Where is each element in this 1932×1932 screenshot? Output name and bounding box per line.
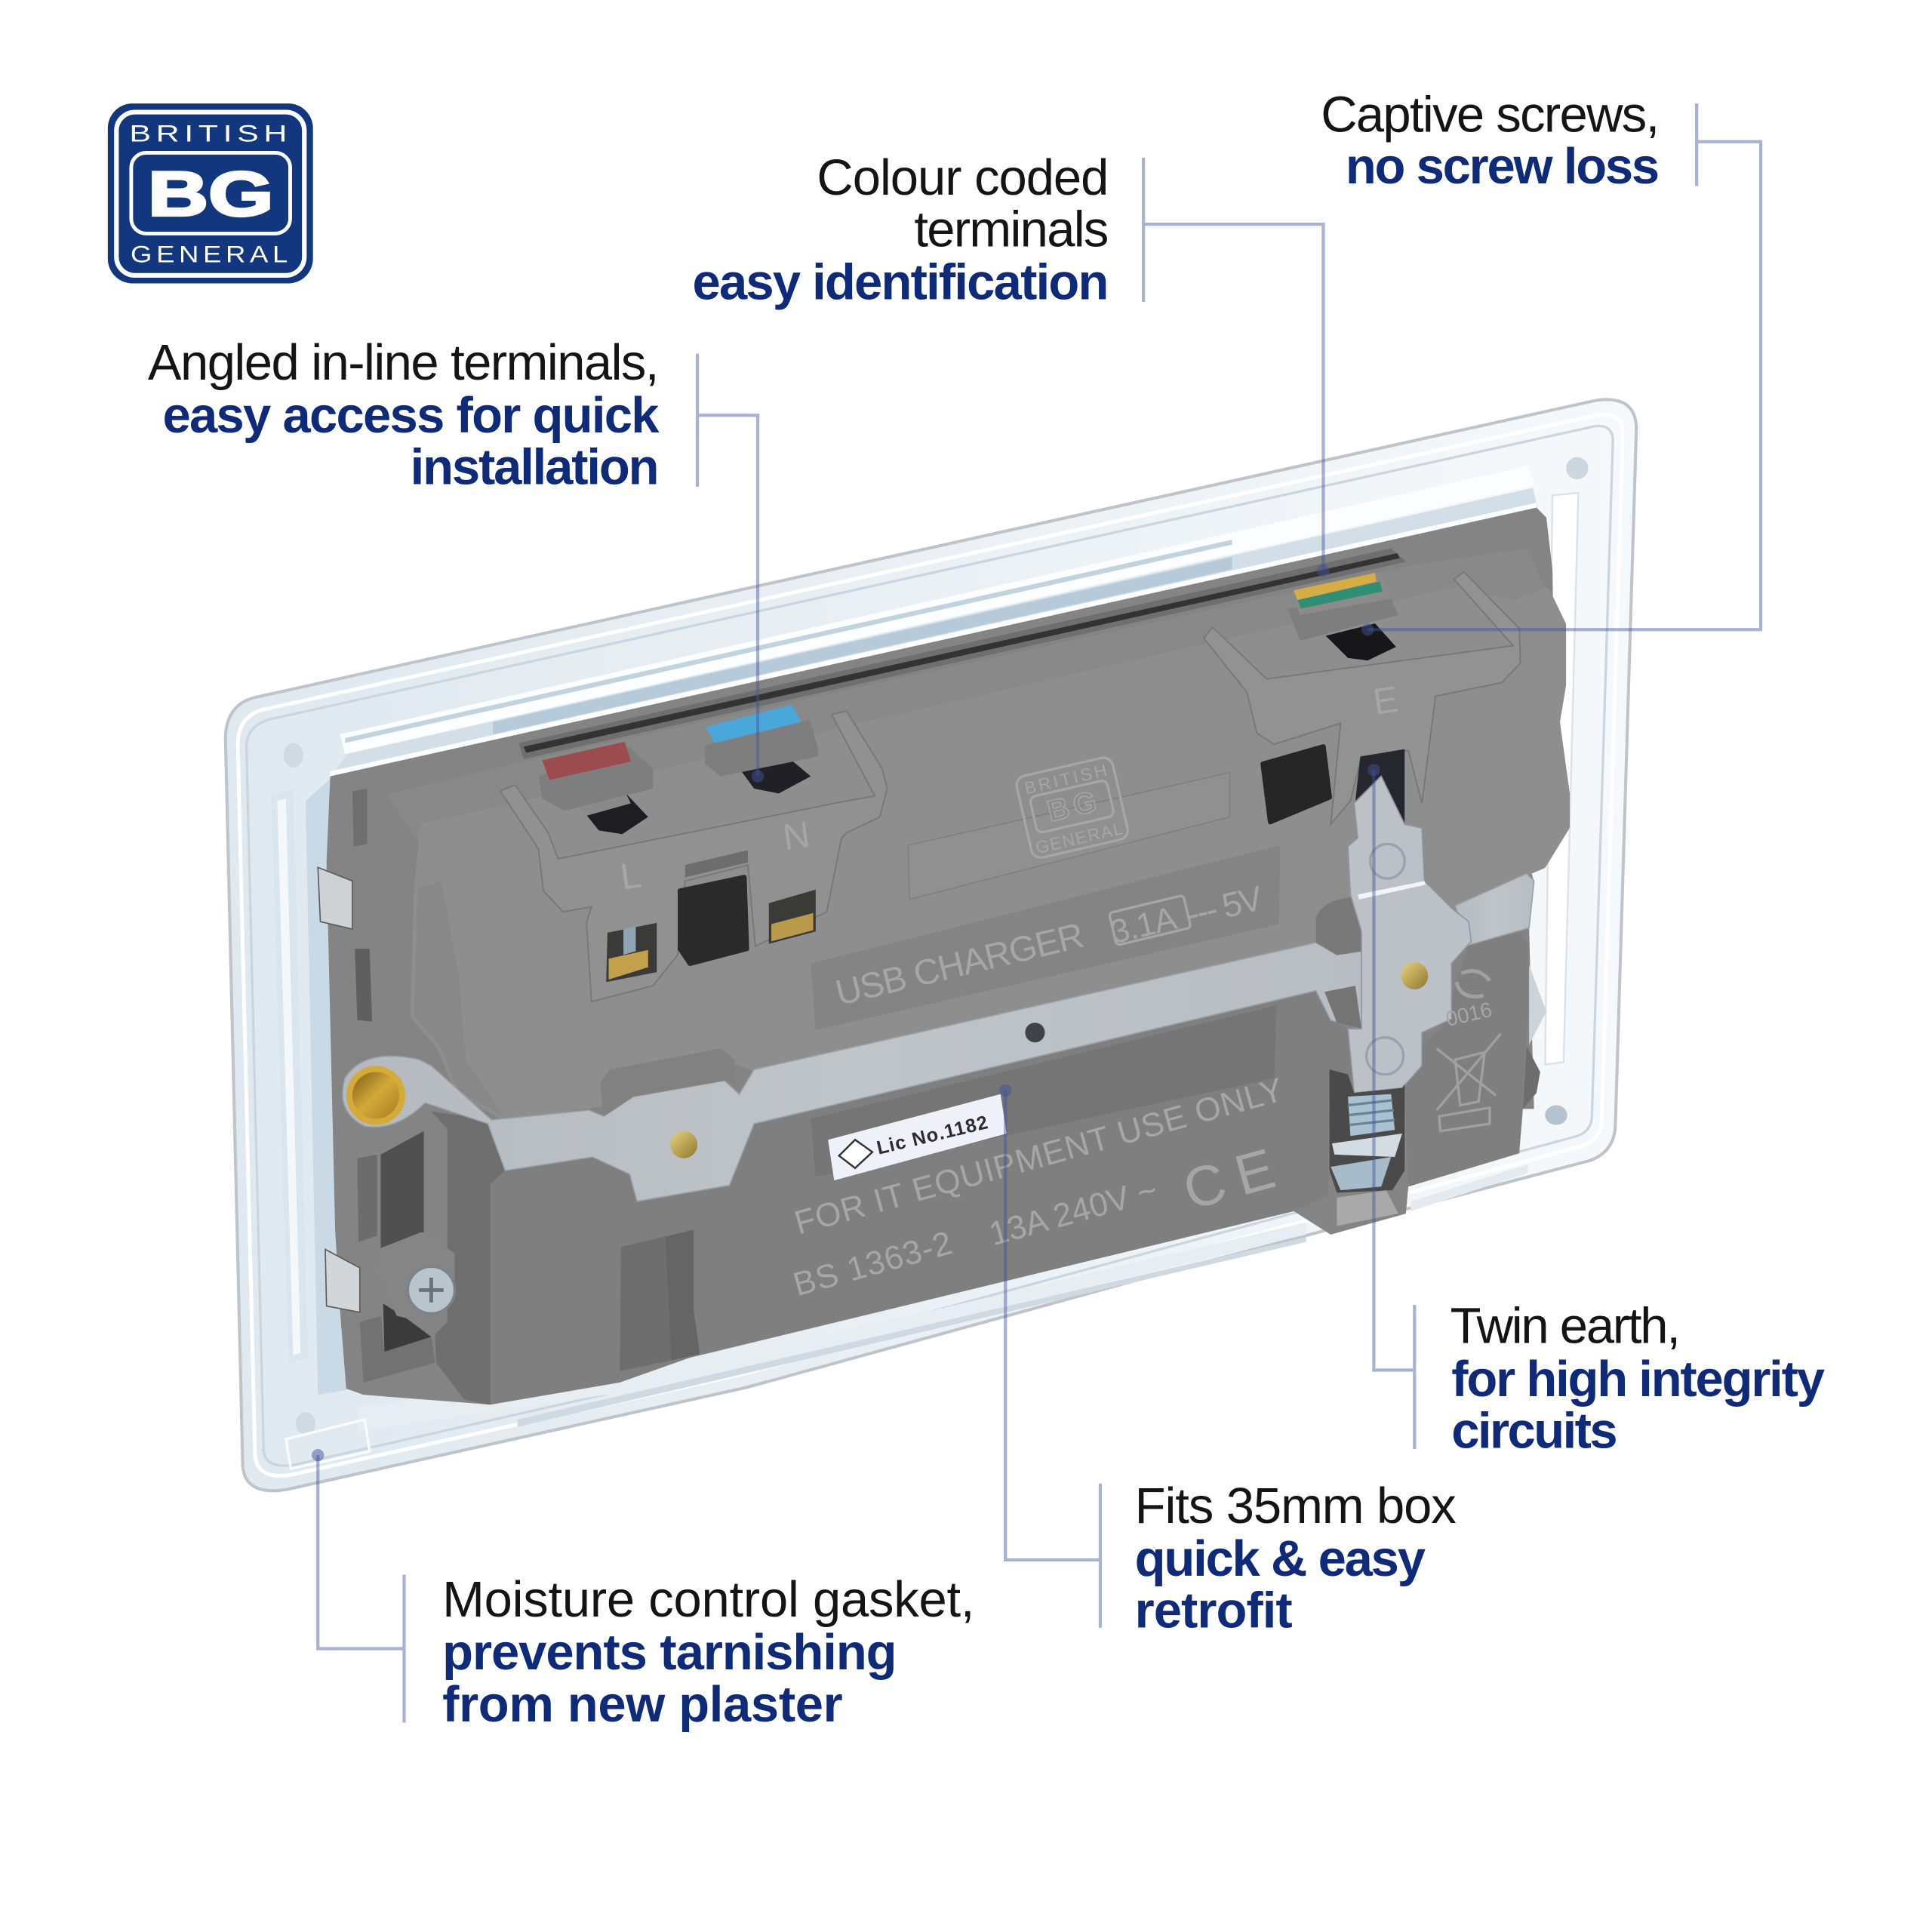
logo: British General: GENERAL (131, 241, 292, 268)
callout: Captive screws: Captive screws, (1321, 87, 1660, 143)
raised panels (908, 773, 1229, 900)
logo: British General (108, 103, 313, 284)
callout: Angled in-line terminals (148, 334, 764, 783)
callout: Twin earth: Twin earth, (1451, 1298, 1681, 1355)
frame side recesses (352, 789, 435, 1383)
engraved BG logo: BG (1044, 786, 1100, 828)
earth bracket (1348, 777, 1471, 1093)
engraved USB text (832, 878, 1266, 1014)
engraved USB text: 3.1A (1107, 900, 1181, 951)
recycling marks: 0016 (1444, 998, 1494, 1031)
clip: L and N terminals (500, 705, 888, 1001)
callout: Moisture control gasket: prevents tarnishing (442, 1624, 897, 1681)
clip: L and N terminals: L (618, 854, 644, 898)
engraved BG logo (1015, 755, 1130, 860)
callout: Twin earth: circuits (1451, 1402, 1618, 1459)
clip: L and N terminals: N (780, 814, 813, 858)
callout: Colour coded terminals: Colour coded (817, 149, 1109, 206)
callout: Moisture control gasket: Moisture control gasket, (442, 1571, 974, 1628)
engraved ratings text: BS 1363-2 (789, 1224, 956, 1303)
recycling marks (1437, 971, 1501, 1131)
label: Lic No: Lic No.1182 (875, 1112, 990, 1159)
lower module (431, 991, 1354, 1404)
terminal holes (579, 793, 648, 834)
callout: Moisture control gasket (312, 1449, 974, 1733)
callout: Angled in-line terminals: easy access for quick (163, 387, 660, 444)
callout: Captive screws: no screw loss (1346, 138, 1660, 195)
engraved ratings text: CE (1177, 1136, 1281, 1222)
clip: E terminal (1204, 572, 1521, 824)
grey back frame (327, 508, 1555, 1404)
top recess band (387, 549, 1546, 851)
upper module (414, 592, 1566, 1118)
clip: E terminal: E (1371, 679, 1401, 723)
callout: Colour coded terminals: easy identification (693, 254, 1109, 311)
terminal screw (1330, 1069, 1404, 1226)
callout: Angled in-line terminals: installation (411, 439, 659, 496)
logo: British General: BG (148, 159, 273, 229)
callout: Fits 35mm box: retrofit (1135, 1583, 1293, 1639)
callout: Fits 35mm box: Fits 35mm box (1135, 1478, 1457, 1534)
callout: Captive screws (1321, 87, 1761, 635)
engraved USB text: --- 5V (1183, 878, 1266, 934)
right lower block (1404, 933, 1527, 1186)
label: Lic No (828, 1094, 1007, 1180)
callout: Colour coded terminals: terminals (914, 202, 1109, 258)
logo: British General: BRITISH (129, 120, 292, 147)
engraved ratings text: 13A 240V ~ (985, 1171, 1161, 1253)
engraved BG logo: GENERAL (1034, 818, 1124, 857)
callout: Fits 35mm box (999, 1084, 1457, 1639)
callout: Moisture control gasket: from new plaster (442, 1676, 843, 1733)
product: socket back plate (226, 399, 1636, 1491)
callout: Twin earth: for high integrity (1451, 1351, 1825, 1407)
callout: Twin earth (1367, 764, 1825, 1459)
engraved BG logo: BRITISH (1023, 760, 1109, 798)
faceplate (226, 399, 1636, 1491)
side clips and mounting screw (318, 867, 1546, 1322)
callout: Angled in-line terminals: Angled in-line terminals, (148, 334, 659, 391)
callout: Fits 35mm box: quick & easy (1135, 1531, 1426, 1587)
terminal openings (606, 746, 1330, 982)
engraved USB text: USB CHARGER (832, 915, 1088, 1014)
metal strap (343, 874, 1534, 1201)
engraved ratings text: FOR IT EQUIPMENT USE ONLY (791, 1071, 1287, 1242)
callout: Colour coded terminals (693, 149, 1330, 577)
